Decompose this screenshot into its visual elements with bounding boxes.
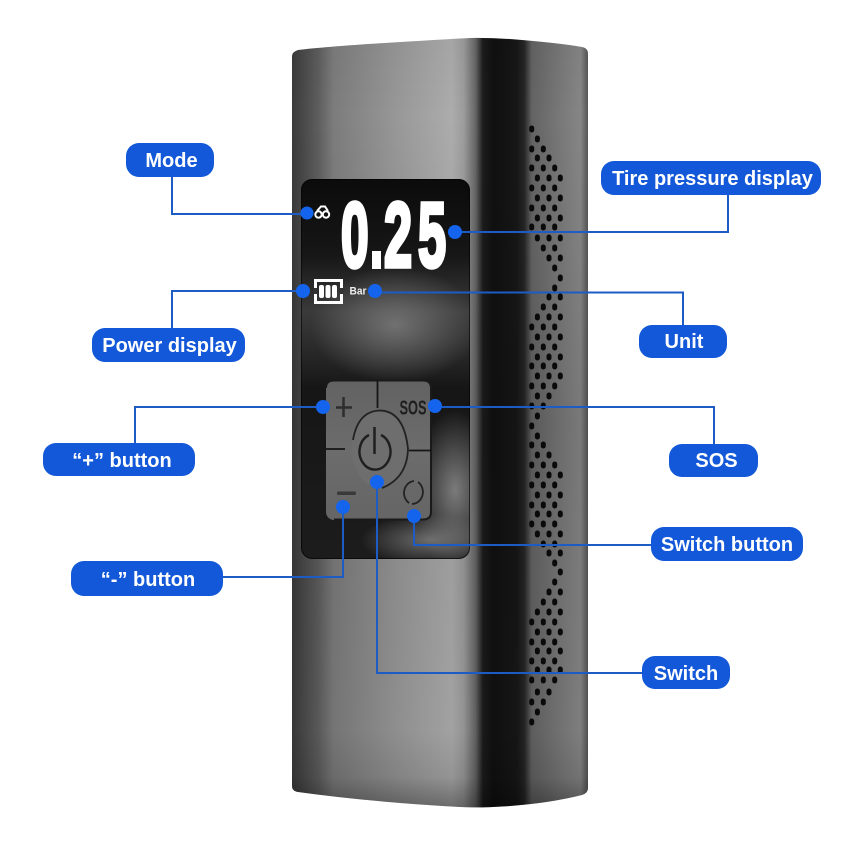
icon: minus xyxy=(337,492,356,495)
unit text: Bar: Bar xyxy=(350,286,367,298)
callout: Switch button xyxy=(407,509,803,561)
callout: minus button xyxy=(71,500,350,596)
callout: Unit xyxy=(368,284,727,358)
callout: Unit: Unit xyxy=(665,331,704,353)
callout: Switch button: Switch button xyxy=(661,534,793,556)
icon: plus xyxy=(336,397,352,417)
callout: Mode xyxy=(126,143,314,220)
callout: minus button: “-” button xyxy=(101,569,195,591)
callout: plus button xyxy=(43,400,330,476)
button dividers xyxy=(326,380,431,450)
power button xyxy=(352,410,408,488)
callout: Switch: Switch xyxy=(654,663,718,685)
callout: SOS: SOS xyxy=(695,450,738,472)
pressure reading: 0.25 xyxy=(341,183,446,286)
display panel xyxy=(301,179,470,559)
icon: mode (car) xyxy=(315,206,329,218)
callout: Tire pressure display: Tire pressure display xyxy=(612,168,814,190)
pressure reading: 0.25: 0 xyxy=(341,183,369,286)
speaker grille holes xyxy=(532,128,560,723)
SOS text: SOS xyxy=(400,398,426,420)
callout: SOS xyxy=(428,399,758,477)
callout: Power display: Power display xyxy=(102,335,238,357)
pressure reading: 0.25: 5 xyxy=(418,183,446,286)
callout: Switch xyxy=(370,475,730,689)
callout: Mode: Mode xyxy=(145,150,198,172)
icon: switch arrows xyxy=(404,481,423,504)
icon: battery level xyxy=(314,280,343,302)
device body xyxy=(292,38,588,807)
callout: Tire pressure display xyxy=(448,161,821,239)
callout: Power display xyxy=(92,284,310,362)
callout: plus button: “+” button xyxy=(72,450,172,472)
button pad xyxy=(326,380,431,520)
pressure reading: 0.25: 2 xyxy=(384,183,412,286)
